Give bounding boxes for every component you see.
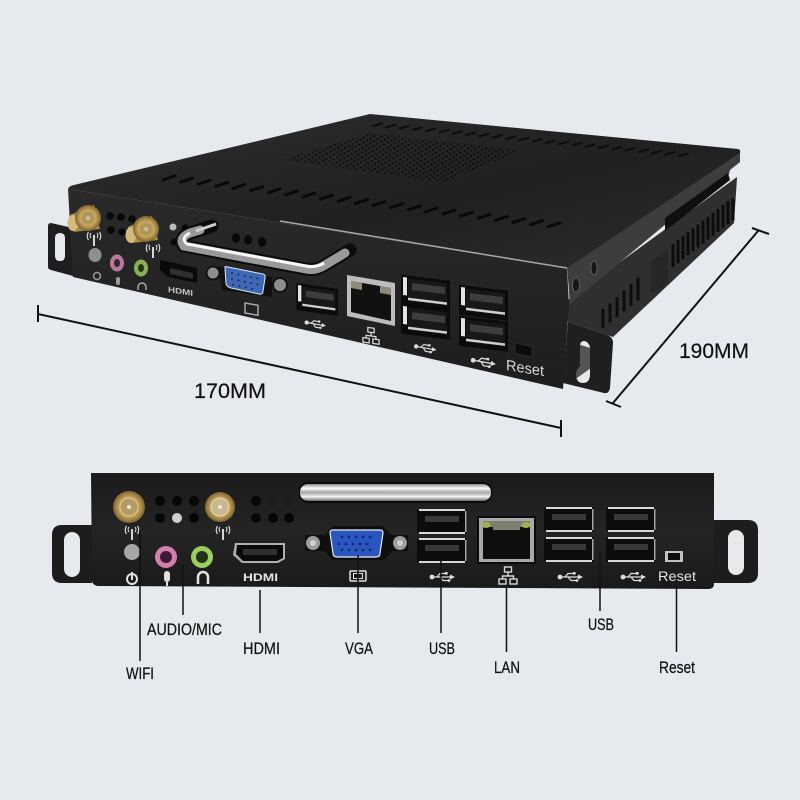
side latch [651,250,668,294]
callout: VGA: VGA [345,639,374,658]
dimension: 190MM depth [606,228,769,407]
WiFi antenna connectors [113,491,235,523]
reset switch and label: Reset [658,568,696,584]
top mesh ventilation [283,133,523,182]
product photo: angled view of mini PC [48,114,740,393]
icon: wifi labels [125,526,230,540]
callout: HDMI: HDMI [243,639,280,658]
callout: USB right [588,552,614,634]
top lid surface [68,114,740,268]
top vent slots back row [373,124,688,156]
callout: AUDIO/MIC [147,565,222,639]
dimension: 170MM width: 170MM [194,380,266,403]
reset switch and label: Reset [506,357,545,380]
callout: USB right: USB [588,615,614,634]
callout: LAN [494,585,520,677]
VGA port [305,526,408,581]
right mounting bracket [563,322,613,393]
side visible through bracket hole [574,343,594,380]
USB port stack 2 [544,507,594,582]
HDMI port: HDMI [168,285,193,298]
HDMI port [160,260,197,298]
dimension: 190MM depth: 190MM [679,340,749,363]
left bracket [52,525,92,583]
USB port stack 3 [606,507,656,582]
power button and audio jacks [88,248,148,290]
vent holes [155,496,294,523]
front edge highlight [280,221,567,268]
side card slot [665,173,730,231]
callout: Reset [659,586,695,677]
LAN port [477,516,536,584]
callout: USB left: USB [429,639,455,658]
front panel [91,473,714,589]
side screws [572,261,597,292]
callout: WIFI: WIFI [126,664,154,683]
front face [68,189,569,389]
product photo: straight front panel view [52,473,758,589]
top vent slots front row [163,176,560,227]
dimension: 170MM width [38,305,561,437]
USB ports [296,275,508,352]
reset switch and label [506,343,545,380]
right bracket [712,520,758,583]
USB port stack 1 [417,509,467,582]
callout: Reset: Reset [659,658,695,677]
power button and icon [124,544,140,584]
handle [299,482,492,503]
LAN port [347,275,395,326]
VGA port [206,266,287,315]
callout: AUDIO/MIC: AUDIO/MIC [147,620,222,639]
callout: VGA [345,555,374,658]
handle [182,224,350,270]
reset switch and label [658,551,696,584]
callout: HDMI [243,590,280,658]
icon: USB and LAN symbols [304,318,497,369]
HDMI port [233,543,285,584]
side lid band [567,150,740,304]
callout: LAN: LAN [494,658,520,677]
vent holes [106,212,266,247]
icon: wifi labels [87,232,160,258]
HDMI port: HDMI [243,572,278,584]
callout: USB left [429,555,455,658]
pink microphone jack [155,546,177,586]
left mounting bracket [48,223,73,276]
side vents [603,198,733,328]
green headphone jack [191,546,213,584]
WiFi antenna connectors [68,205,159,243]
right side body [568,177,737,337]
